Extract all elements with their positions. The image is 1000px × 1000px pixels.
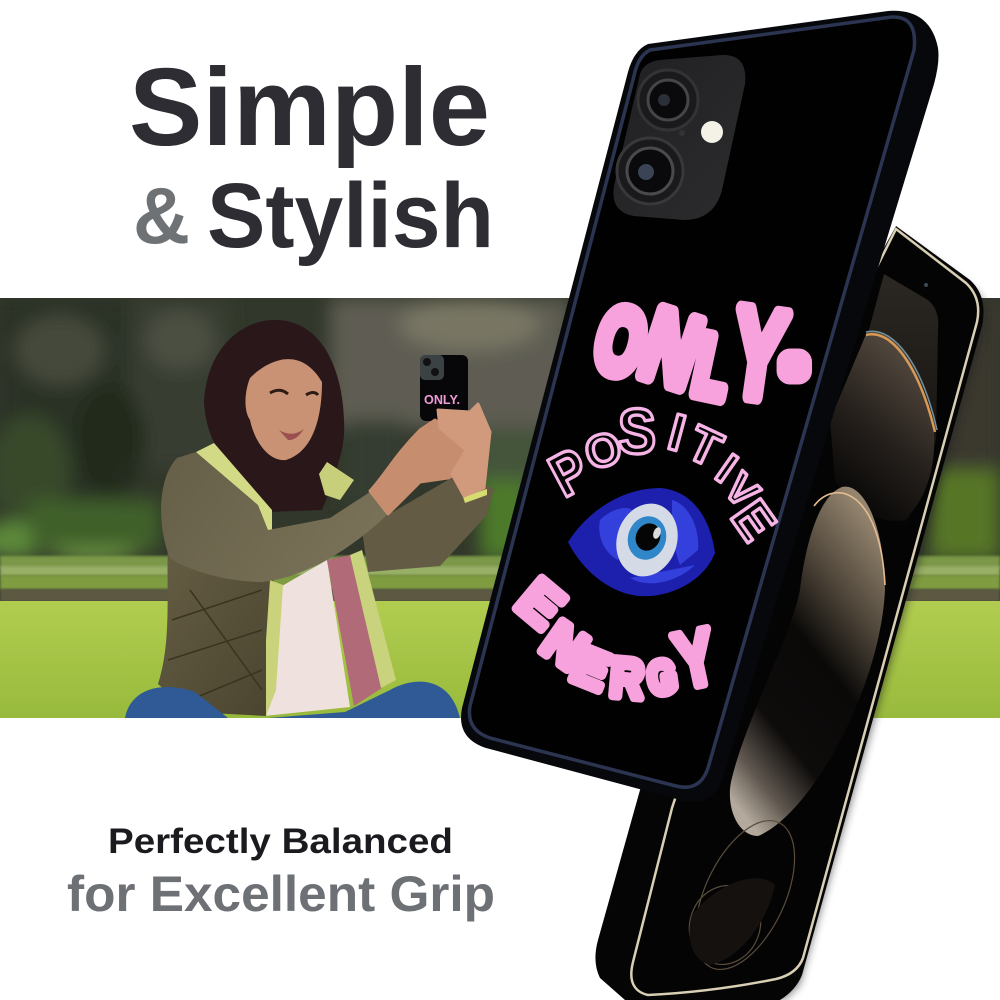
bracelet	[463, 489, 487, 503]
near sleeve	[161, 452, 388, 582]
artwork: ENERGY: G	[644, 649, 680, 705]
case rim	[469, 17, 915, 787]
artwork: POSITIVE	[539, 396, 787, 552]
face	[245, 359, 322, 460]
lower curves	[675, 806, 815, 984]
right lime strip	[350, 550, 396, 688]
title: Simple & Stylish: &	[133, 171, 190, 260]
flash	[701, 121, 723, 143]
artwork: ONLY.: .	[786, 317, 803, 384]
artwork: ONLY.: Y	[723, 282, 794, 428]
artwork: ONLY.: N	[629, 288, 713, 410]
artwork: ENERGY	[505, 566, 723, 710]
photo band: park background	[0, 298, 1000, 718]
artwork: POSITIVE: I	[707, 445, 746, 492]
artwork: evil eye	[568, 488, 715, 596]
mini phone	[420, 355, 468, 421]
back phone: gold handset	[595, 226, 986, 1000]
artwork: POSITIVE: S	[618, 396, 656, 467]
artwork: ENERGY: N	[531, 610, 598, 681]
artwork: ENERGY: E	[564, 636, 617, 702]
caption: Perfectly Balanced for Excellent Grip	[67, 822, 495, 922]
title: Simple & Stylish: Simple	[129, 46, 490, 169]
title: Simple & Stylish	[129, 46, 494, 267]
mini phone: ONLY.	[424, 392, 460, 407]
lime collar	[196, 443, 272, 535]
artwork: POSITIVE: T	[679, 415, 730, 478]
case body	[461, 11, 938, 802]
artwork: ENERGY: E	[505, 566, 576, 641]
caption: Perfectly Balanced for Excellent Grip: Perfectly Balanced	[108, 822, 453, 861]
lower lens	[617, 138, 683, 204]
caption: Perfectly Balanced for Excellent Grip: for Excellent Grip	[67, 866, 495, 922]
artwork: POSITIVE: V	[715, 464, 768, 517]
artwork: ONLY.	[585, 282, 803, 428]
artwork: POSITIVE: O	[579, 420, 627, 480]
zip lime strip	[266, 580, 283, 716]
near forearm and hand	[370, 420, 467, 514]
plaid shirt	[327, 555, 382, 706]
body	[595, 226, 984, 1000]
artwork: ENERGY: Y	[667, 612, 723, 705]
soft shadow	[700, 235, 986, 1000]
far hand	[438, 404, 490, 496]
mouth	[279, 429, 304, 440]
earpiece and camera dot	[924, 283, 928, 287]
front phone case	[461, 11, 938, 802]
title: Simple & Stylish: Stylish	[207, 165, 494, 267]
artwork: POSITIVE: I	[662, 403, 691, 463]
hair back	[204, 320, 344, 512]
camera module	[613, 55, 745, 220]
wallpaper panel	[850, 274, 938, 530]
eyes	[270, 390, 318, 395]
quilting lines	[168, 590, 262, 700]
gold rim	[631, 229, 978, 995]
artwork: POSITIVE: E	[719, 490, 787, 552]
dome one	[830, 331, 934, 521]
far sleeve	[362, 477, 494, 572]
artwork: ENERGY: R	[608, 647, 646, 710]
upper lens	[638, 70, 698, 130]
white top	[264, 560, 350, 716]
left jacket body	[158, 540, 275, 716]
artwork: POSITIVE: P	[539, 435, 600, 510]
jeans	[125, 687, 228, 718]
artwork: ONLY.: O	[585, 287, 656, 398]
dome two	[730, 487, 885, 836]
photo: woman taking a selfie	[125, 320, 494, 718]
rainbow flare	[866, 331, 937, 432]
artwork: ONLY.: L	[686, 318, 739, 418]
